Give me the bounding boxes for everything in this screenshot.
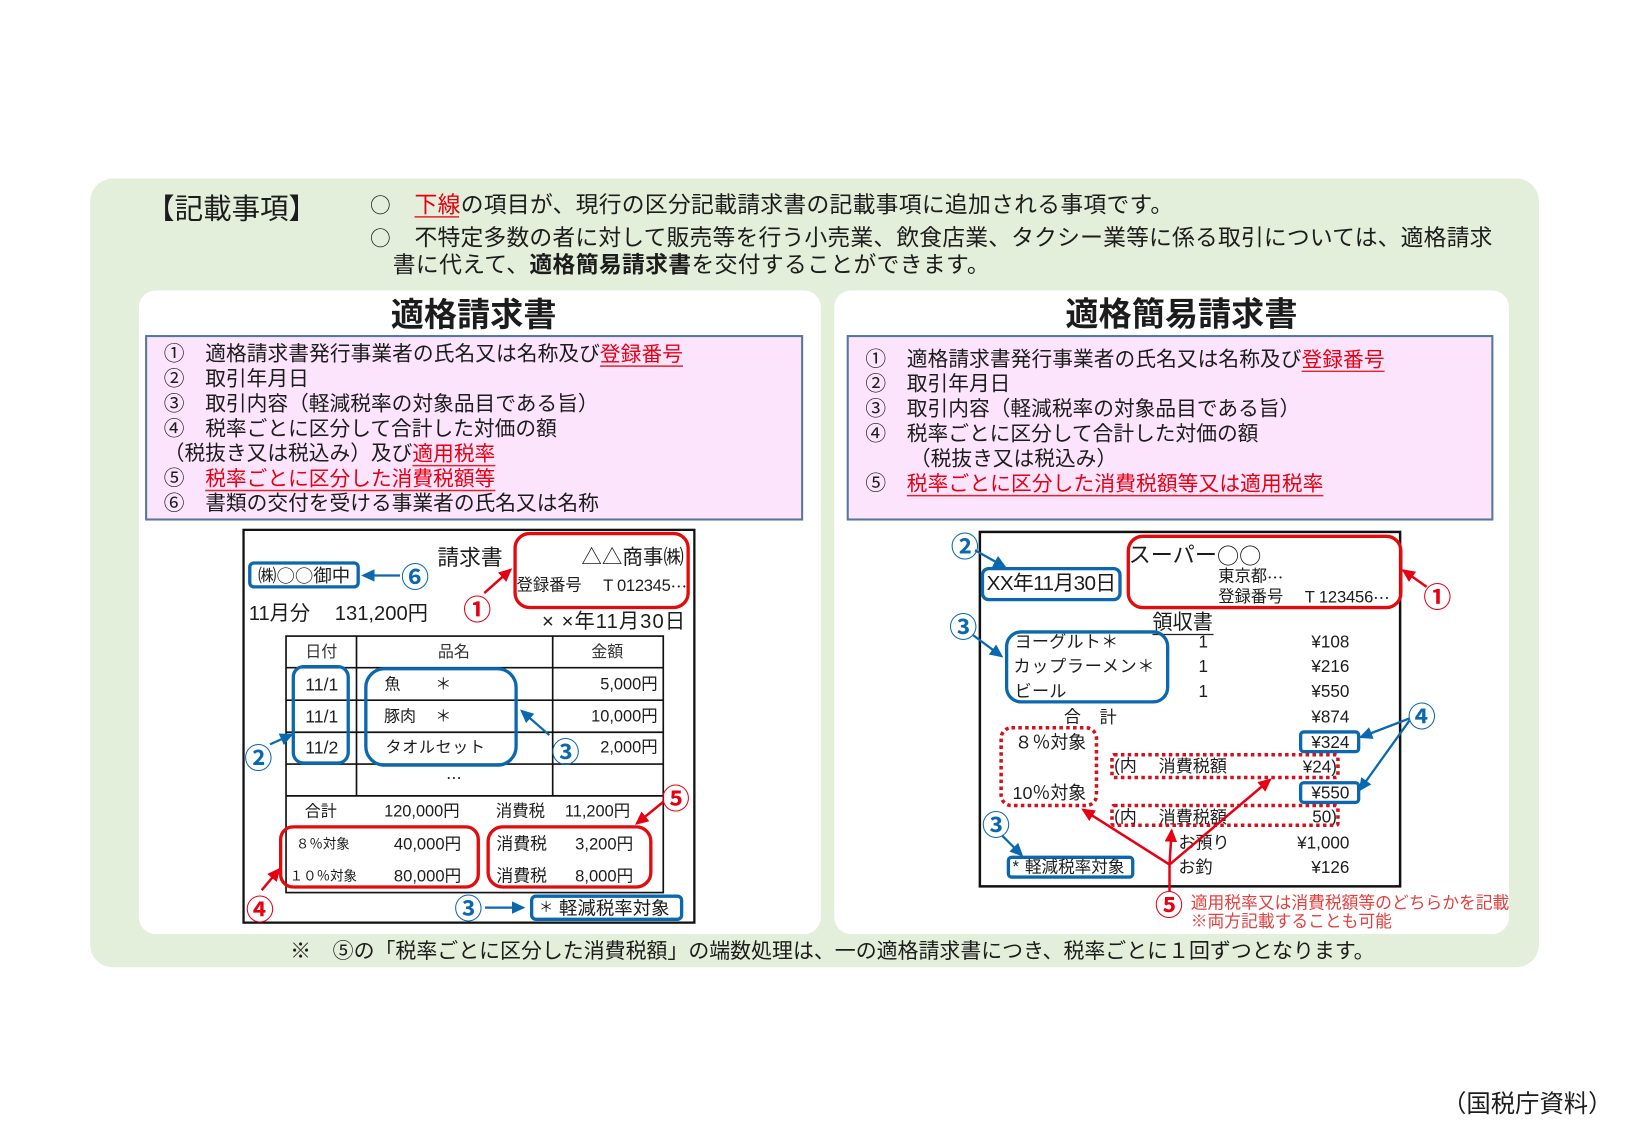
list: required items of qualified invoice: 書類の交付を受ける事業者の氏名又は名称: [205, 492, 599, 515]
invoice table: 5,000円: [600, 675, 658, 693]
list: required items of qualified invoice: 税率ごとに区分して合計した対価の額: [205, 417, 557, 440]
receipt lines: 消費税額: [1159, 757, 1227, 776]
invoice table: 豚肉: [384, 707, 416, 725]
note: red annotation: ※両方記載することも可能: [1191, 912, 1392, 931]
invoice table: ＊: [435, 675, 451, 693]
callout 6: recipient: [250, 556, 429, 596]
callout 4: amounts by tax rate: [1301, 695, 1436, 802]
receipt lines: 1: [1198, 682, 1208, 701]
receipt header: 領収書: [1152, 611, 1213, 634]
list: required items of qualified invoice: ②: [164, 368, 185, 391]
receipt header: XX年11月30日: [987, 572, 1116, 595]
invoice table: ８％対象: [296, 836, 350, 851]
callout 1: issuer and registration number: [463, 534, 688, 629]
invoice table: １０％対象: [290, 868, 357, 883]
invoice sample: [244, 530, 694, 929]
receipt lines: ビール: [1015, 682, 1066, 701]
callout 3: reduced rate note: *: [1013, 857, 1019, 876]
invoice header: 131,200円: [335, 603, 428, 625]
heading: 適格請求書: 適格請求書: [391, 297, 557, 334]
invoice table: 11/1: [305, 706, 338, 726]
text block: intro notes: ○: [370, 222, 391, 252]
callout 5: tax rate or tax amount: [1001, 728, 1338, 924]
callout 3: item description: [366, 669, 580, 771]
receipt lines: ¥216: [1310, 657, 1349, 676]
panel: 適格請求書: [139, 290, 821, 934]
callout 1: issuer and registration number: [1128, 536, 1451, 616]
callout 3: item description: ③: [552, 731, 580, 771]
list: required items of simplified invoice: 取引年月日: [907, 373, 1010, 396]
list: required items of simplified invoice: ⑤: [865, 472, 886, 495]
invoice header: × ×年11月30日: [542, 610, 685, 633]
panel: 適格簡易請求書: [834, 290, 1510, 934]
callout 5: consumption tax by rate: [488, 778, 690, 887]
invoice table: 消費税: [496, 803, 545, 821]
text block: intro notes: 書に代えて、適格簡易請求書を交付することができます。: [393, 252, 990, 278]
invoice table: ＊: [435, 707, 451, 725]
callout 5: tax rate or tax amount: ⑤: [1155, 884, 1183, 924]
receipt lines: ８％対象: [1015, 732, 1086, 752]
callout 3: item description: ③: [949, 606, 977, 646]
invoice header: 11月分: [249, 603, 310, 625]
invoice table: 3,200円: [575, 834, 633, 853]
callout 3: reduced rate note: ③: [454, 888, 482, 928]
list: required items of qualified invoice: 税率ごとに区分した消費税額等: [205, 467, 495, 490]
receipt lines: (内: [1114, 807, 1137, 826]
invoice table: 11,200円: [565, 803, 630, 821]
receipt sample: [949, 525, 1510, 931]
invoice header: △△商事㈱: [581, 546, 684, 569]
invoice header: ㈱○○御中: [258, 562, 350, 588]
receipt lines: ¥324: [1310, 733, 1349, 752]
receipt header: 東京都…: [1218, 564, 1283, 588]
footnote: ⑤の「税率ごとに区分した消費税額」の端数処理は、一の適格請求書につき、税率ごとに１回ずつとなります。: [333, 940, 1375, 963]
invoice table: 品名: [438, 643, 470, 661]
invoice table: タオルセット: [386, 738, 485, 756]
receipt header: T 123456…: [1305, 585, 1390, 609]
receipt lines: ¥126: [1310, 858, 1349, 877]
callout 3: reduced rate note: [454, 888, 682, 928]
receipt lines: 1: [1198, 632, 1208, 651]
receipt lines: 合: [1064, 707, 1081, 726]
invoice header: T 012345…: [603, 573, 687, 597]
invoice table: [286, 636, 663, 893]
receipt lines: ¥550: [1310, 682, 1349, 701]
source note: （国税庁資料）: [1442, 1091, 1612, 1118]
receipt lines: カップラーメン＊: [1014, 657, 1154, 676]
list: required items of qualified invoice: 取引年月日: [205, 368, 309, 391]
list: required items of qualified invoice: [146, 336, 802, 519]
callout 3: reduced rate note: ＊: [539, 900, 553, 916]
list: required items of simplified invoice: 税率ごとに区分して合計した対価の額: [907, 422, 1259, 445]
callout 4: totals by tax rate: [246, 827, 478, 929]
list: required items of qualified invoice: 適格請求書発行事業者の氏名又は名称及び登録番号: [205, 343, 683, 366]
callout 2: transaction dates: ②: [244, 737, 272, 777]
invoice table: 120,000円: [384, 803, 460, 821]
invoice table: 魚: [384, 675, 401, 693]
list: required items of qualified invoice: 取引内容（軽減税率の対象品目である旨）: [205, 392, 599, 415]
receipt lines: ¥550: [1310, 784, 1349, 803]
list: required items of qualified invoice: ①: [164, 343, 185, 366]
heading: 記載事項: 【記載事項】: [146, 194, 317, 226]
text block: intro notes: [370, 188, 1493, 278]
list: required items of simplified invoice: ④: [865, 422, 886, 445]
invoice table: 11/2: [305, 737, 338, 757]
list: required items of qualified invoice: （税抜き又は税込み）及び適用税率: [164, 442, 495, 465]
receipt lines: [1013, 632, 1349, 877]
invoice table: 日付: [305, 643, 337, 661]
invoice table: 80,000円: [394, 866, 461, 885]
callout 4: totals by tax rate: ④: [246, 889, 274, 929]
text block: intro notes: 不特定多数の者に対して販売等を行う小売業、飲食店業、タクシー業等に係る取引については、適格請求: [415, 225, 1493, 251]
receipt lines: 計: [1100, 707, 1117, 726]
callout 2: transaction dates: [244, 667, 348, 777]
callout 2: transaction date: [951, 525, 1120, 600]
invoice table: 消費税: [496, 834, 547, 853]
receipt lines: ¥24): [1302, 758, 1337, 777]
invoice header: 登録番号: [517, 576, 582, 594]
invoice table: 金額: [591, 643, 623, 661]
receipt lines: ヨーグルト＊: [1015, 632, 1118, 651]
callout 3: reduced rate note: ③: [982, 804, 1010, 844]
text block: intro notes: ○: [370, 188, 391, 218]
receipt lines: 10％対象: [1013, 783, 1086, 803]
callout 4: amounts by tax rate: ④: [1408, 695, 1436, 735]
receipt lines: ¥108: [1310, 632, 1349, 651]
invoice table: 合計: [305, 803, 337, 821]
receipt lines: 50): [1312, 807, 1337, 826]
heading: 適格簡易請求書: 適格簡易請求書: [1065, 296, 1297, 333]
receipt header: [987, 539, 1390, 635]
list: required items of qualified invoice: ⑤: [164, 467, 185, 490]
receipt lines: ¥1,000: [1296, 833, 1349, 852]
invoice table: 2,000円: [600, 738, 658, 756]
list: required items of simplified invoice: 取引内容（軽減税率の対象品目である旨）: [907, 398, 1300, 421]
callout 2: transaction date: ②: [951, 525, 979, 565]
note: red annotation: 適用税率又は消費税額等のどちらかを記載: [1191, 893, 1510, 912]
list: required items of simplified invoice: 適格請求書発行事業者の氏名又は名称及び登録番号: [907, 348, 1385, 371]
receipt lines: 消費税額: [1159, 807, 1227, 826]
invoice table: 10,000円: [591, 707, 658, 725]
invoice table: 消費税: [496, 866, 547, 885]
receipt lines: (内: [1114, 757, 1137, 776]
invoice table: 40,000円: [394, 834, 461, 853]
callout 1: issuer and registration number: ①: [463, 589, 491, 629]
list: required items of simplified invoice: [848, 336, 1492, 519]
text block: intro notes: 下線の項目が、現行の区分記載請求書の記載事項に追加される事項です。: [415, 191, 1173, 217]
list: required items of simplified invoice: ②: [865, 373, 886, 396]
receipt lines: お釣: [1178, 858, 1213, 877]
invoice table: 8,000円: [575, 866, 633, 885]
receipt header: 登録番号: [1218, 588, 1283, 606]
list: required items of qualified invoice: ③: [164, 392, 185, 415]
invoice header: [249, 545, 687, 633]
receipt lines: お預り: [1178, 833, 1230, 852]
list: required items of qualified invoice: ⑥: [164, 492, 185, 515]
note: red annotation: [1191, 893, 1510, 931]
receipt lines: ¥874: [1310, 707, 1349, 726]
list: required items of simplified invoice: 税率ごとに区分した消費税額等又は適用税率: [907, 472, 1323, 495]
callout 3: reduced rate note: [982, 804, 1133, 877]
receipt lines: 1: [1198, 657, 1208, 676]
callout 5: consumption tax by rate: ⑤: [662, 778, 690, 818]
list: required items of simplified invoice: ①: [865, 348, 886, 371]
callout 3: reduced rate note: 軽減税率対象: [559, 898, 670, 919]
invoice table: …: [446, 767, 462, 789]
invoice header: 請求書: [437, 545, 503, 570]
receipt header: スーパー○○: [1129, 539, 1261, 571]
list: required items of simplified invoice: ③: [865, 398, 886, 421]
footnote: ※: [290, 940, 311, 963]
callout 6: recipient: ⑥: [401, 556, 429, 596]
panel: green background: [90, 179, 1539, 967]
invoice table: 11/1: [305, 674, 338, 694]
callout 3: item description: [949, 606, 1168, 702]
callout 1: issuer and registration number: ①: [1423, 576, 1451, 616]
list: required items of simplified invoice: （税抜き又は税込み）: [910, 447, 1117, 470]
callout 3: reduced rate note: 軽減税率対象: [1025, 857, 1124, 876]
list: required items of qualified invoice: ④: [164, 417, 185, 440]
